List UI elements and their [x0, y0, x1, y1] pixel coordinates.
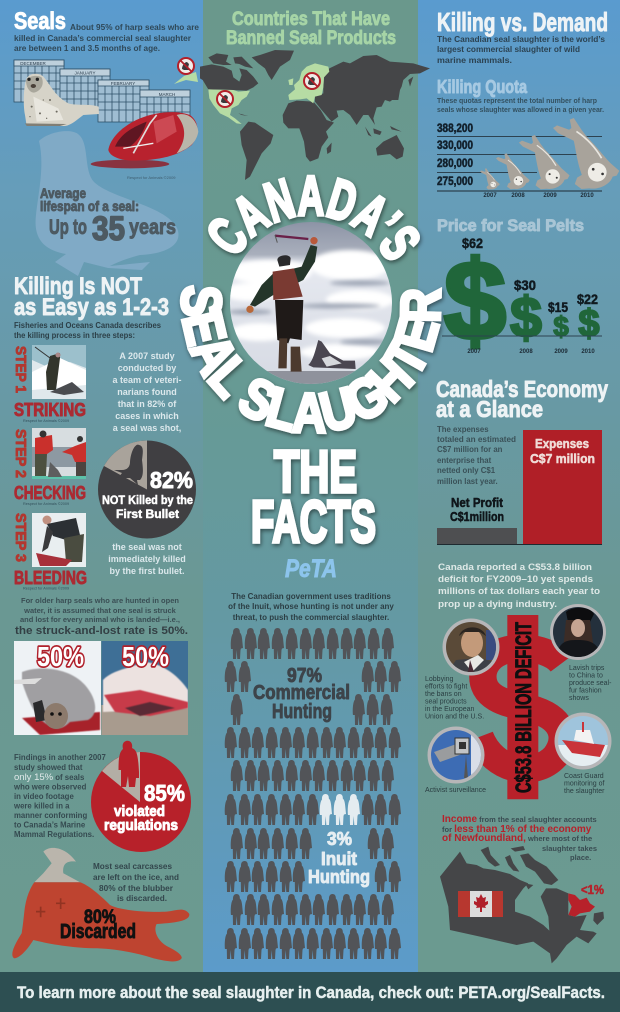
label: 3% inuit hunting: 3%: [327, 829, 352, 849]
label: violated regulations: [104, 803, 178, 834]
text: trips caption: fur fashion: [569, 688, 602, 694]
panel: central people chart: [225, 592, 401, 959]
label: 85%: 85%: [144, 780, 185, 806]
chart: commercial hunters: [225, 628, 401, 959]
icon: hunter silhouette: [118, 741, 139, 787]
label: not killed by first bullet: [102, 493, 193, 521]
heading: countries that have banned: Banned Seal Products: [226, 28, 396, 49]
text: older harp seals: water, it is assumed that one seal is struck: [23, 606, 177, 615]
text: struck-and-lost rate: the struck-and-lost rate is 50%.: [15, 625, 188, 637]
text: lobbying caption: Lobbying: [425, 676, 454, 683]
panel: violated regulations: [13, 741, 191, 852]
photo: bleeding: [32, 513, 86, 567]
text: expenses: enterprise that: [437, 456, 492, 465]
labels: prices: [462, 235, 598, 315]
labels: prices: $15: [548, 299, 568, 315]
labels: price years: [467, 349, 595, 355]
text: findings: study showed that: [14, 763, 83, 772]
text: income share: for less than 1% of the economy: [442, 824, 592, 835]
icon: alaska highlight: [174, 72, 198, 84]
heading: Seals: Seals: [14, 8, 66, 35]
label: expenses: C$7 million: [530, 452, 595, 466]
panel: central title: [178, 174, 446, 583]
photo: lobbying man: [442, 618, 500, 676]
text: deficit report: [438, 562, 600, 610]
chart: dollar signs: [442, 235, 602, 363]
labels: prices: $30: [514, 277, 536, 293]
label: 97% commercial hunting: 97%: [287, 665, 322, 687]
text: findings: to Canada’s Marine: [14, 820, 86, 830]
icon: big red dollar sign: [480, 615, 562, 799]
icon: large seal silhouette: [36, 131, 178, 276]
text: inuit traditions: of the Inuit, whose hunting is not under any: [228, 602, 394, 611]
photo: striking: [32, 345, 86, 399]
labels: prices: $22: [577, 291, 598, 307]
icon: ban alaska: [178, 58, 194, 74]
labels: quota values: 280,000: [437, 158, 473, 170]
text: seal not killed: [108, 542, 186, 576]
text: expenses: totaled an estimated: [437, 435, 516, 444]
text: average lifespan: lifespan of a seal:: [40, 198, 139, 214]
text: expenses: The expenses: [437, 425, 489, 434]
heading: killing is not as easy: Killing Is NOT: [14, 273, 142, 300]
label: 3% inuit hunting: [308, 829, 370, 887]
heading: canada's economy: [436, 376, 608, 422]
photo: coast guard ship: [554, 712, 612, 770]
text: lobbying caption: seal products: [425, 698, 467, 706]
label: step 1 vertical: STEP 1: [12, 346, 29, 393]
text: deficit report: millions of tax dollars each year to: [438, 586, 600, 597]
heading: killing is not as easy: [14, 273, 169, 321]
panel: struck and lost: [14, 596, 188, 735]
text: findings: who were observed: [13, 782, 87, 792]
text: seals intro: [14, 22, 199, 53]
labels: quota years: 2009: [543, 193, 557, 199]
chart: inuit hunters: [320, 794, 360, 825]
calendar: December: DECEMBER: [20, 61, 46, 66]
text: seals intro: About 95% of harp seals who are: [70, 22, 199, 32]
text: coast guard caption: Coast Guard: [564, 773, 604, 780]
text: deficit report: prop up a dying industry.: [438, 599, 557, 610]
icon: ban north america: [217, 91, 233, 107]
photo: bloody ice: [101, 641, 188, 735]
panel: canada's economy: [436, 376, 608, 544]
heading: killing is not as easy: as Easy as 1-2-3: [14, 294, 169, 321]
text: average lifespan: Up to: [49, 216, 87, 239]
text: credit: Respect for Animals ©2009: [23, 586, 69, 590]
text: carcasses: is discarded.: [117, 894, 167, 903]
text: largest slaughter: [437, 34, 605, 65]
heading: countries that have banned: Countries That Have: [232, 9, 390, 30]
calendar: February: FEBRUARY: [111, 81, 135, 86]
labels: quota years: 2010: [580, 193, 594, 199]
text: trips caption: to China to: [569, 672, 603, 680]
label: 82%: 82%: [150, 467, 193, 493]
panel: killing vs demand: [437, 7, 619, 199]
text: lobbying caption: efforts to fight: [425, 684, 467, 690]
text: photo credit: Respect for Animals ©2009: [127, 175, 176, 180]
heading: countries that have banned: [226, 9, 396, 49]
text: lobbying caption: in the European: [425, 706, 475, 713]
panel: seals age: [14, 8, 199, 276]
chart: 82 percent pie: [98, 440, 196, 538]
label: less than 1%: <1%: [581, 882, 604, 897]
labels: quota years: [483, 193, 594, 199]
text: carcasses: are left on the ice, and: [93, 873, 179, 882]
text: carcasses: Most seal carcasses: [93, 862, 173, 871]
text: largest slaughter: The Canadian seal slaughter is the world’s: [437, 34, 605, 44]
text: inuit traditions: [228, 592, 394, 622]
title: seal slaughter: SEAL SLAUGHTER: [178, 284, 446, 438]
text: inuit traditions: The Canadian government uses traditions: [231, 592, 391, 601]
text: expenses: C$7 million for an: [437, 445, 503, 454]
label: 80% discarded: Discarded: [60, 921, 136, 943]
panel: right column background: [418, 0, 620, 972]
text: expenses: netted only C$1: [437, 466, 496, 475]
label: net profit: Net Profit: [451, 496, 504, 510]
text: seal not killed: by the first bullet.: [109, 566, 185, 576]
labels: quota years: 2007: [483, 193, 497, 199]
text: seal not killed: immediately killed: [108, 554, 186, 564]
panel: centre column background: [203, 0, 418, 972]
label: not killed by first bullet: First Bullet: [116, 507, 179, 521]
bar: expenses: [523, 430, 602, 544]
title: canada's: CANADA’S: [206, 174, 424, 265]
calendar: January: [60, 69, 110, 111]
footer: call to action: [0, 972, 620, 1012]
label: 80% discarded: [60, 907, 136, 943]
heading: killing quota: Killing Quota: [437, 77, 528, 97]
text: largest slaughter: marine mammals.: [437, 55, 512, 65]
label: net profit: C$1million: [450, 510, 504, 524]
label: expenses: Expenses: [535, 437, 589, 451]
photo: surveillance camera: [428, 726, 484, 784]
label: 50% left: 50%: [37, 641, 84, 672]
text: quota explanation: seals whose slaughter was allowed in a given year.: [437, 105, 604, 114]
text: income share: slaughter takes: [542, 844, 597, 853]
text: income share: [442, 814, 597, 862]
panel: deficit spending: [425, 562, 612, 799]
text: coast guard caption: monitoring of: [564, 780, 605, 788]
text: lobbying caption: Union and the U.S.: [425, 714, 484, 720]
text: average lifespan: 35: [92, 210, 125, 248]
labels: prices: $62: [462, 235, 483, 251]
text: findings: were killed in a: [13, 802, 70, 810]
chart: profit vs expenses: [437, 430, 602, 544]
text: income share: place.: [570, 853, 591, 862]
panel: killing not easy: [12, 273, 196, 590]
chart: dollar signs: $: [578, 303, 600, 345]
text: findings: only 15% of seals: [14, 772, 85, 783]
heading: price for seal pelts: Price for Seal Pelts: [437, 216, 584, 235]
title: the facts: [251, 439, 376, 555]
text: 2007 study: conducted by: [118, 363, 176, 373]
text: seals intro: killed in Canada’s commercial seal slaughter: [14, 33, 192, 43]
bar: net profit: [437, 528, 517, 544]
text: quota explanation: These quotas represent the total number of harp: [437, 96, 598, 105]
text: coast guard caption: the slaughter: [564, 788, 605, 795]
label: 3% inuit hunting: Hunting: [308, 867, 370, 887]
chart: 85 percent pie: [91, 741, 191, 852]
panel: seal pelt prices: [437, 216, 602, 363]
step 3: [12, 513, 87, 590]
text: older harp seals: and lost for every animal who is landed—i.e.,: [20, 615, 180, 624]
text: inuit traditions: threat, to push the commercial slaughter.: [233, 613, 389, 622]
label: deficit amount: C$53.8 BILLION DEFICIT: [511, 622, 536, 793]
text: trips caption: produce seal-: [569, 680, 612, 687]
calendar: March: MARCH: [159, 92, 175, 97]
text: 2007 study: that in 82% of: [118, 399, 177, 409]
label: net profit: [450, 496, 504, 524]
text: 2007 study: a team of veteri-: [112, 375, 182, 385]
labels: price years: 2010: [581, 349, 595, 355]
text: deficit report: deficit for FY2009–10 yet spends: [438, 574, 593, 585]
icon: seal in pie: [114, 445, 143, 485]
icon: seal 2007: [480, 168, 500, 189]
labels: quota values: 388,200: [437, 123, 473, 135]
photo: skinned seal carcass: [91, 112, 198, 168]
text: trips caption: shows: [569, 695, 589, 702]
label: step 3 vertical: STEP 3: [12, 513, 29, 562]
labels: quota years: 2008: [511, 193, 525, 199]
calendar: February: [98, 80, 149, 122]
text: older harp seals: [20, 596, 180, 624]
text: 2007 study: [112, 351, 182, 433]
text: lobbying caption: [425, 676, 484, 720]
step 2: [12, 428, 86, 506]
text: carcasses: 80% of the blubber: [99, 884, 173, 893]
panel: banned countries: [174, 9, 430, 180]
chart: dollar signs: $: [510, 286, 542, 350]
text: income share: of Newfoundland, where most of the: [442, 833, 592, 844]
icon: Canadian flag: [458, 891, 503, 917]
chart: dollar signs: $: [553, 311, 569, 342]
calendar: December: [14, 60, 64, 102]
title: the facts: FACTS: [251, 489, 376, 555]
panel: newfoundland income: [440, 814, 604, 963]
text: trips caption: Lavish trips: [569, 665, 605, 672]
labels: quota values: [437, 123, 473, 188]
text: older harp seals: For older harp seals who are hunted in open: [21, 596, 179, 605]
labels: price years: 2007: [467, 349, 481, 355]
map: Canada: [440, 846, 604, 963]
panel: left column background: [0, 0, 203, 972]
chart: dollar signs: $: [444, 238, 506, 363]
photo: checking: [32, 428, 86, 479]
text: credit: Respect for Animals ©2009: [23, 502, 69, 506]
labels: quota values: 275,000: [437, 176, 473, 188]
photo: wounded seal: [14, 641, 101, 735]
text: income share: Income from the seal slaughter accounts: [442, 814, 597, 825]
label: 80% discarded: 80%: [84, 907, 116, 928]
step 1: [12, 345, 86, 423]
label: violated regulations: violated: [114, 803, 165, 820]
text: quota explanation: [437, 96, 604, 114]
text: trips caption: [569, 665, 612, 702]
label: 3% inuit hunting: Inuit: [321, 849, 357, 869]
title: the facts: THE: [274, 439, 357, 505]
label: not killed by first bullet: NOT Killed by the: [102, 493, 193, 507]
text: surveillance caption: Activist surveillance: [425, 787, 486, 794]
text: deficit report: Canada reported a C$53.8 billion: [438, 562, 592, 573]
text: fisheries intro: Fisheries and Oceans Canada describes: [14, 321, 162, 330]
text: expenses: million last year.: [437, 477, 498, 486]
text: average lifespan: [40, 185, 176, 248]
label: bleeding: BLEEDING: [14, 568, 87, 588]
text: findings: Mammal Regulations.: [14, 830, 94, 839]
text: coast guard caption: [564, 773, 605, 795]
labels: price years: 2008: [519, 349, 533, 355]
text: seals intro: are between 1 and 3.5 months of age.: [14, 43, 160, 53]
text: 2007 study: A 2007 study: [119, 351, 175, 361]
label: 97% commercial hunting: [253, 665, 350, 723]
map: world: [200, 50, 430, 180]
label: step 2 vertical: STEP 2: [12, 429, 29, 478]
text: fisheries intro: [14, 321, 162, 340]
label: 97% commercial hunting: Commercial: [253, 682, 350, 704]
text: average lifespan: years: [129, 216, 176, 239]
text: lobbying caption: the bans on: [425, 691, 462, 698]
icon: seal 2008: [496, 153, 530, 189]
calendar: January: JANUARY: [75, 70, 95, 76]
text: 2007 study: narians found: [117, 387, 177, 397]
icon: seal 2009: [519, 135, 570, 189]
chart: quota by year: [437, 118, 619, 199]
photo: fur fashion woman: [550, 604, 606, 660]
icon: seal with blubber fill: [12, 848, 189, 961]
text: largest slaughter: largest commercial slaughter of wild: [437, 44, 580, 54]
icon: seal 2010: [553, 118, 619, 189]
text: 2007 study: a seal was shot,: [113, 423, 181, 433]
label: striking: STRIKING: [14, 400, 86, 420]
text: fisheries intro: the killing process in three steps:: [14, 331, 135, 340]
calendar: March: [140, 90, 190, 132]
text: expenses: [437, 425, 516, 486]
text: average lifespan: Average: [40, 185, 86, 201]
text: findings: in video footage: [14, 792, 74, 801]
chart: calendars: [14, 60, 190, 132]
text: carcasses: [93, 862, 179, 903]
label: 50% right: 50%: [122, 641, 169, 672]
text: credit: Respect for Animals ©2009: [23, 419, 69, 423]
label: checking: CHECKING: [14, 483, 86, 503]
text: findings: [13, 753, 106, 839]
photo: hunter and seal: [222, 222, 394, 384]
figure: hunter: [246, 235, 356, 372]
icon: ban europe: [304, 73, 320, 89]
photo: harp seal pup: [24, 74, 99, 126]
text: seal not killed: the seal was not: [112, 542, 182, 552]
labels: quota values: 330,000: [437, 140, 473, 152]
text: 2007 study: cases in which: [115, 411, 179, 421]
heading: canada's economy: at a Glance: [436, 396, 543, 422]
label: expenses: [530, 437, 595, 466]
label: violated regulations: regulations: [104, 817, 178, 834]
text: findings: manner conforming: [14, 811, 87, 820]
labels: price years: 2009: [554, 349, 568, 355]
panel: 80 percent discarded: [12, 848, 189, 961]
logo: PETA: PeTA: [285, 555, 337, 583]
text: findings: Findings in another 2007: [14, 753, 106, 762]
label: 97% commercial hunting: Hunting: [272, 701, 332, 723]
